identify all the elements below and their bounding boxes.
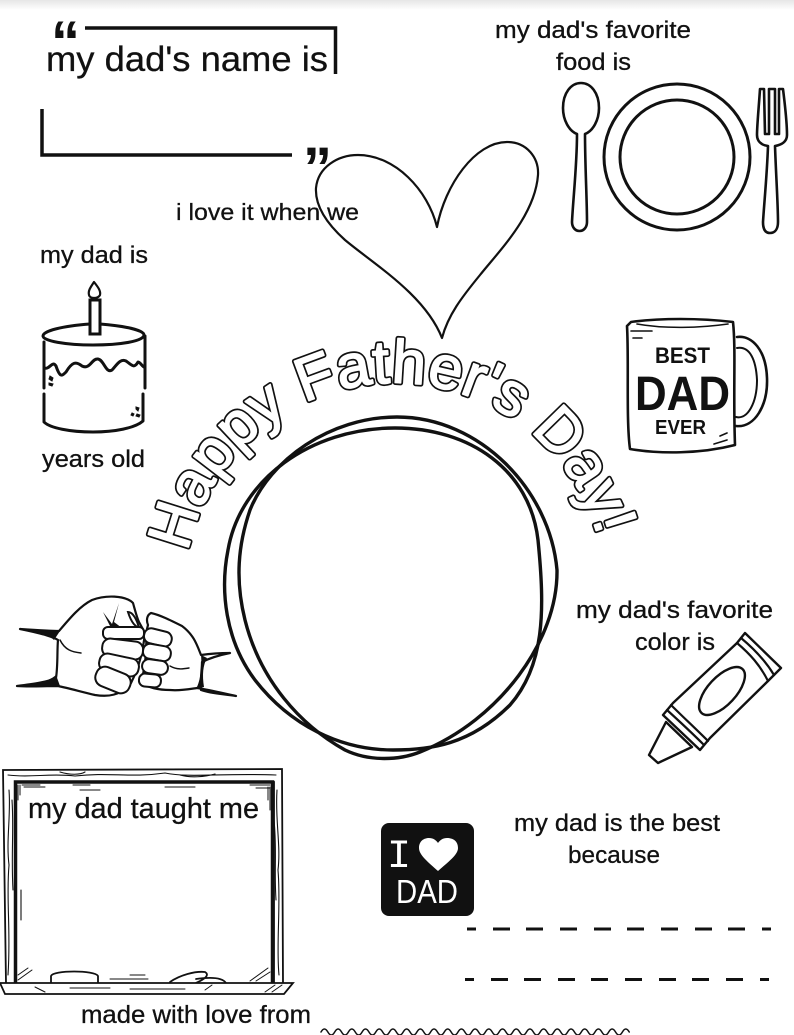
dashed writing lines bbox=[465, 929, 771, 980]
label: made with love from: made with love from bbox=[81, 1001, 311, 1029]
icon: I love dad badge: I bbox=[387, 835, 411, 880]
label: years old: years old bbox=[42, 446, 145, 473]
bottom bracket bbox=[42, 109, 292, 155]
chalk bbox=[170, 972, 226, 983]
best because label: because bbox=[568, 842, 660, 869]
mug text bbox=[635, 343, 730, 439]
icon: I love dad badge bbox=[381, 823, 474, 916]
icon: fist bump bbox=[17, 597, 236, 696]
title: Happy Father's Day!: Happy Father's Day! bbox=[148, 338, 637, 548]
top bracket bbox=[85, 28, 336, 74]
left fist bbox=[17, 597, 145, 696]
best because label bbox=[514, 810, 720, 869]
icon: best dad ever mug bbox=[627, 319, 767, 452]
candle flame bbox=[89, 282, 100, 298]
label: my dad taught me bbox=[28, 793, 259, 825]
ledge bbox=[0, 983, 293, 994]
icon: crayon bbox=[649, 633, 781, 763]
name label: my dad's name is bbox=[46, 40, 328, 79]
cake body bbox=[43, 324, 144, 345]
color label: color is bbox=[635, 629, 715, 656]
icon: birthday cake bbox=[43, 282, 145, 432]
plate bbox=[604, 84, 750, 230]
inner dark edge bbox=[16, 782, 272, 983]
color label: my dad's favorite bbox=[576, 597, 773, 624]
frame bbox=[3, 769, 283, 984]
label: my dad is: my dad is bbox=[40, 242, 148, 269]
name box: my dad's name is bbox=[42, 10, 336, 201]
food label bbox=[495, 17, 691, 76]
mug text: BEST bbox=[655, 343, 711, 368]
label: i love it when we: i love it when we bbox=[176, 199, 359, 225]
heart bbox=[316, 142, 538, 338]
opening quote mark: “ bbox=[51, 10, 80, 75]
corner shading bbox=[18, 785, 270, 981]
closing quote mark: ” bbox=[303, 136, 332, 201]
eraser bbox=[51, 972, 98, 983]
left fingers bbox=[93, 627, 144, 696]
color label bbox=[576, 597, 773, 656]
wood grain bbox=[8, 772, 279, 975]
wavy signature line bbox=[321, 1029, 629, 1035]
fork bbox=[757, 89, 787, 233]
title: Happy Father's Day!: Happy Father's Day! bbox=[146, 336, 639, 550]
candle bbox=[90, 300, 100, 334]
mug handle bbox=[736, 337, 767, 426]
food label: my dad's favorite bbox=[495, 17, 691, 44]
best because label: my dad is the best bbox=[514, 810, 720, 837]
scribbled photo circle bbox=[225, 417, 557, 758]
thumb bbox=[128, 612, 139, 628]
food label: food is bbox=[556, 49, 631, 76]
icon: plate with spoon and fork bbox=[563, 83, 787, 233]
mug body bbox=[627, 319, 735, 452]
icon: blackboard bbox=[0, 769, 293, 994]
mug text: EVER bbox=[655, 417, 707, 439]
icon: I love dad badge: DAD bbox=[396, 873, 458, 910]
right fingers bbox=[138, 627, 173, 688]
right hand bbox=[141, 613, 236, 696]
spoon bbox=[563, 83, 599, 231]
mug text: DAD bbox=[635, 368, 730, 421]
